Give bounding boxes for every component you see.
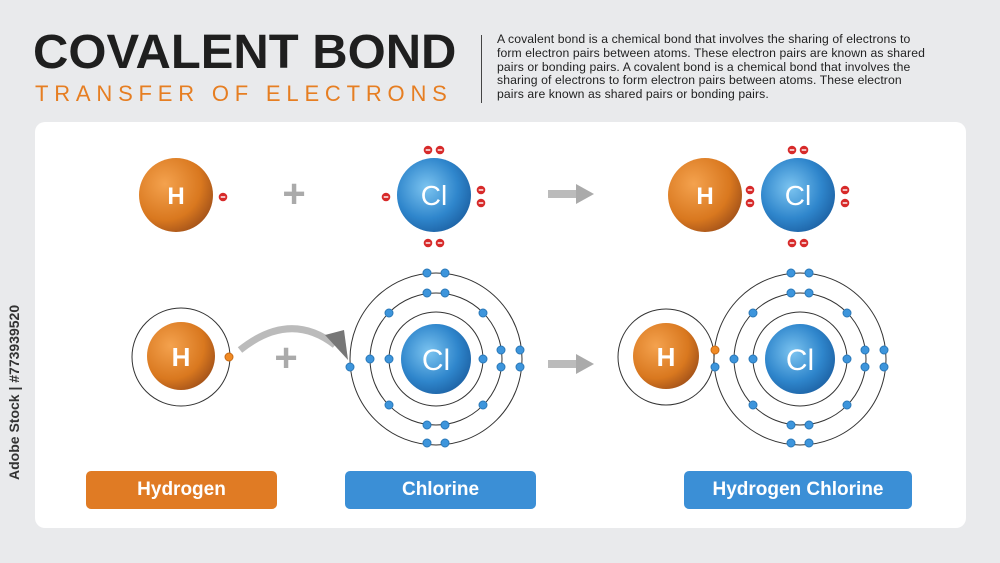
title: COVALENT BOND bbox=[33, 26, 456, 79]
bohr model: chlorine: Cl bbox=[422, 344, 450, 377]
side watermark text: Adobe Stock | #773939520 bbox=[6, 305, 22, 480]
top row: HCl molecule: H bbox=[696, 183, 714, 210]
top row: HCl molecule bbox=[668, 146, 849, 247]
subtitle: TRANSFER OF ELECTRONS bbox=[35, 81, 453, 106]
panel: main diagram bbox=[35, 122, 966, 528]
label: Chlorine bbox=[345, 471, 536, 509]
bohr model: HCl bbox=[618, 269, 888, 447]
top row: chlorine atom with electrons bbox=[382, 146, 485, 247]
bohr model: HCl: Cl bbox=[786, 344, 814, 377]
top row: hydrogen atom: H bbox=[167, 183, 185, 210]
top row: HCl molecule: Cl bbox=[785, 180, 811, 211]
label: Hydrogen Chlorine: Hydrogen Chlorine bbox=[712, 479, 884, 500]
label: Hydrogen Chlorine bbox=[684, 471, 912, 509]
top row: hydrogen atom bbox=[139, 158, 227, 232]
label: Hydrogen bbox=[86, 471, 277, 509]
arrow top bbox=[548, 184, 594, 204]
top row: chlorine atom with electrons: Cl bbox=[421, 180, 447, 211]
plus sign bottom: + bbox=[274, 336, 298, 380]
label: Chlorine: Chlorine bbox=[402, 479, 479, 500]
bohr model: hydrogen: H bbox=[172, 342, 190, 372]
bohr model: chlorine bbox=[346, 269, 524, 447]
label: Hydrogen: Hydrogen bbox=[137, 479, 226, 500]
bohr model: HCl: H bbox=[657, 342, 675, 372]
plus sign top: + bbox=[282, 172, 306, 216]
description text: A covalent bond is a chemical bond that involves the sharing of electrons to form electron pairs between atoms. These electron pairs are known as shared pairs or bonding pairs. A covalent bond is a chemical bond that involves the sharing of electrons to form electron pairs between atoms. These electron pairs are known as shared pairs or bonding pairs. bbox=[497, 32, 925, 101]
bohr model: hydrogen bbox=[132, 308, 233, 406]
arrow bottom bbox=[548, 354, 594, 374]
curved arrow bbox=[240, 329, 348, 360]
